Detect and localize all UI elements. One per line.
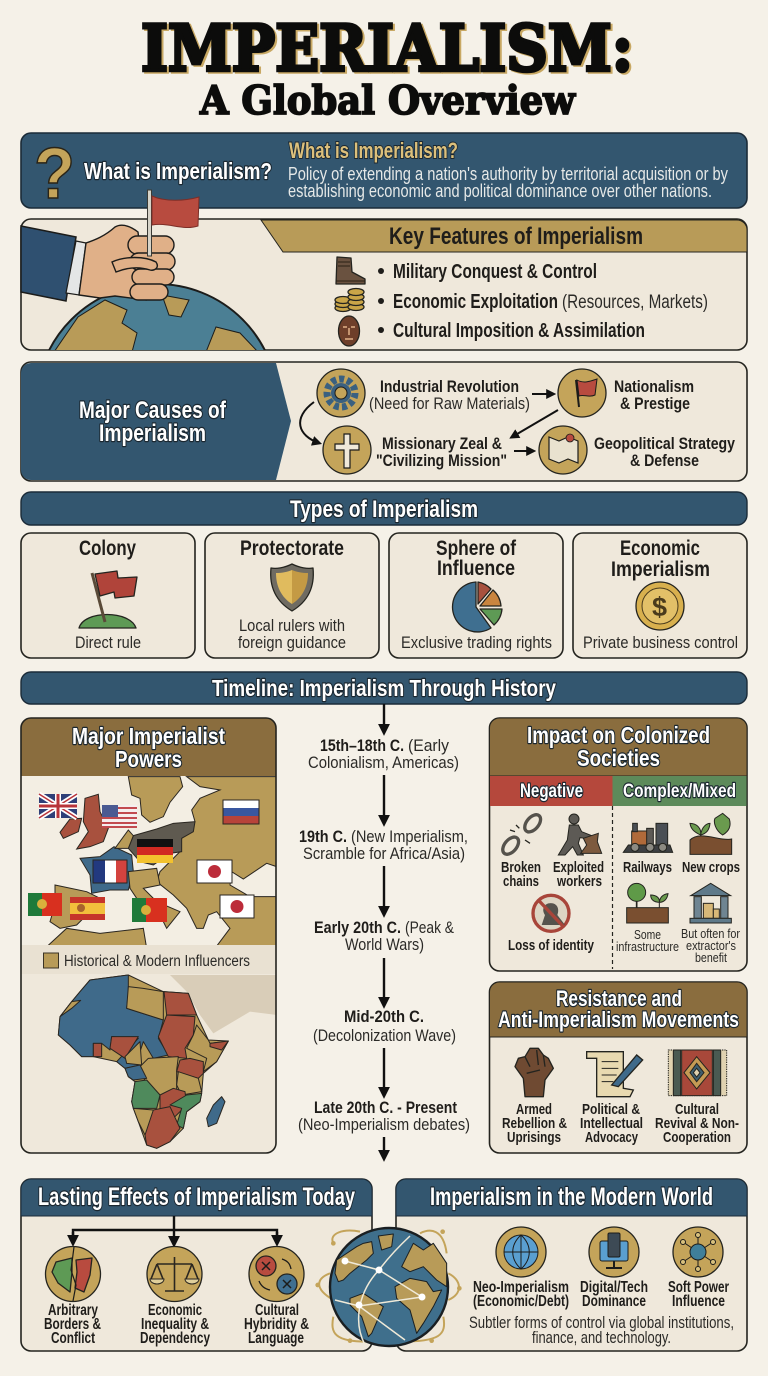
event: mid 20th century: (Decolonization Wave) [313, 1026, 456, 1045]
labels: mixed impacts [616, 859, 741, 965]
header: resistance [490, 982, 747, 1037]
icon: dollar coin [636, 582, 684, 630]
icon: scales [147, 1246, 202, 1302]
timeline [298, 704, 470, 1158]
flag: france [93, 860, 127, 883]
event: early 20th century [314, 918, 455, 954]
label: economic inequality: Economic [148, 1302, 202, 1319]
title: IMPERIALISM: [143, 13, 635, 88]
flag: russia [223, 800, 259, 824]
icon: arbitrary borders [46, 1246, 100, 1302]
event: mid 20th century [313, 1007, 456, 1045]
labels: mixed impacts: Railways [623, 859, 672, 876]
card: protectorate: Local rulers with [239, 616, 345, 635]
event: 15th-18th century: (Early [408, 736, 449, 755]
card: sphere of influence [389, 533, 563, 658]
flag: spain [70, 897, 105, 920]
banner: types of imperialism [21, 492, 747, 525]
icon: neo-imperialism [496, 1227, 546, 1277]
labels: resistance: Cooperation [663, 1129, 731, 1146]
label: soft power: Soft Power [668, 1279, 729, 1296]
arrow: to early 20th century [383, 866, 385, 914]
central globe [315, 1228, 462, 1346]
event: early 20th century: (Peak & [405, 918, 455, 937]
panel: lasting effects [21, 1179, 372, 1351]
card: protectorate: Protectorate [240, 537, 344, 560]
icon: mask [338, 316, 360, 346]
icon: bank [690, 883, 731, 923]
network nodes [342, 1258, 426, 1308]
icon: railway train [623, 823, 673, 852]
globe continents [335, 1234, 447, 1337]
event: 15th-18th century [308, 736, 459, 772]
label: neo-imperialism [473, 1279, 569, 1310]
labels: resistance [502, 1101, 739, 1146]
causes banner [21, 363, 291, 480]
illustration: flag [148, 190, 199, 256]
labels: negative impacts: Loss of identity [508, 937, 595, 954]
card: sphere of influence: Exclusive trading rights [401, 633, 552, 652]
labels: resistance: Revival & Non- [655, 1115, 739, 1132]
labels: resistance: Rebellion & [502, 1115, 567, 1132]
map: africa [58, 975, 277, 1148]
text: missionary zeal [376, 434, 507, 470]
arrow: to late 20th century [383, 1048, 385, 1095]
label: digital dominance [580, 1279, 648, 1310]
header: key features [261, 220, 747, 252]
icon: woven rug [668, 1050, 727, 1096]
column header: negative: Negative [520, 781, 583, 802]
labels: mixed impacts: benefit [695, 950, 727, 965]
arrow: to mid 20th century [383, 958, 385, 1005]
labels: resistance: Uprisings [507, 1129, 561, 1146]
label: arbitrary borders: Conflict [51, 1330, 95, 1347]
illustration: globe [48, 284, 266, 350]
label: cultural hybridity: Language [248, 1330, 304, 1347]
card: economic imperialism [573, 533, 747, 658]
arrow: timeline start [383, 704, 385, 732]
event: mid 20th century: Mid-20th C. [344, 1007, 424, 1026]
event: 19th century [299, 827, 468, 863]
label: economic inequality [140, 1302, 210, 1347]
panel: impact on colonized societies [490, 718, 747, 971]
panel: major causes [21, 362, 747, 481]
text: geopolitical [594, 434, 735, 470]
header: impact [490, 718, 747, 776]
legend: Historical & Modern Influencers [64, 953, 250, 970]
event: 19th century: 19th C. [299, 827, 347, 846]
arrow: industrial to missionary [300, 402, 319, 443]
icon: cross [323, 426, 371, 474]
card: protectorate: foreign guidance [238, 633, 346, 652]
causes banner: Imperialism [99, 420, 206, 447]
labels: resistance: Intellectual [580, 1115, 643, 1132]
event: late 20th century [298, 1098, 470, 1134]
header: impact: Impact on Colonized [527, 722, 710, 748]
flag: japan [197, 860, 232, 883]
panel: what is imperialism [21, 133, 747, 214]
feature list: Economic Exploitation [393, 291, 558, 313]
trade routes [335, 1236, 422, 1345]
labels: mixed impacts: extractor's [686, 938, 736, 953]
label: cultural hybridity: Hybridity & [244, 1316, 309, 1333]
header: key features: Key Features of Imperialism [389, 223, 643, 250]
panel: key features [20, 190, 748, 351]
labels: resistance: Advocacy [585, 1129, 638, 1146]
label: economic inequality: Inequality & [141, 1316, 209, 1333]
icon: raised fist [515, 1048, 553, 1097]
connector arrows [73, 1216, 277, 1244]
header: major powers: Major Imperialist [72, 723, 225, 749]
event: 15th-18th century: Colonialism, Americas) [308, 753, 459, 772]
icon: colony flag [79, 571, 137, 628]
header: lasting effects [21, 1179, 372, 1216]
label: cultural hybridity [244, 1302, 309, 1347]
flag: germany [137, 839, 173, 863]
card: sphere of influence: Influence [437, 557, 515, 580]
icon: soft power [673, 1227, 723, 1277]
card: economic imperialism: Imperialism [611, 558, 710, 581]
event: 19th century: Scramble for Africa/Asia) [303, 844, 465, 863]
label: digital dominance: Digital/Tech [580, 1279, 648, 1296]
event: late 20th century: (Neo-Imperialism debates) [298, 1115, 470, 1134]
text: nationalism [614, 377, 694, 413]
card: colony [21, 533, 195, 658]
arrow: missionary to geopolitics [514, 450, 533, 452]
panel: modern world [396, 1179, 747, 1351]
column header: negative [490, 776, 612, 806]
icon: scroll and pen [587, 1052, 643, 1097]
illustration: shirt cuff [66, 241, 86, 295]
flag: portugal second [132, 898, 167, 922]
title: IMPERIALISM: [141, 12, 633, 86]
illustration: jacket sleeve [21, 226, 76, 301]
feature list: (Resources, Markets) [562, 292, 708, 313]
icon: coins [335, 288, 364, 312]
arrow: nationalism to missionary [512, 410, 558, 437]
card: colony: Colony [79, 537, 136, 560]
icon: infrastructure [627, 883, 668, 923]
icon: shield [271, 564, 313, 611]
label: neo-imperialism: Neo-Imperialism [473, 1279, 569, 1296]
icon: boot [336, 257, 365, 284]
label: what is imperialism: What is Imperialism? [84, 158, 272, 184]
flag: united states [102, 805, 137, 828]
event: late 20th century: Late 20th C. - Present [314, 1098, 457, 1117]
banner: timeline [21, 672, 747, 704]
icon: cultural hybridity [249, 1246, 304, 1302]
definition text [288, 164, 728, 201]
icon: dollar coin: $ [652, 592, 667, 622]
labels: negative impacts: chains [503, 873, 539, 890]
text: industrial revolution: (Need for Raw Materials) [369, 394, 530, 413]
chart: pie icon [453, 582, 502, 632]
feature list: Military Conquest & Control [393, 261, 597, 283]
arrow: to 19th century [383, 775, 385, 823]
column header: complex: Complex/Mixed [623, 781, 736, 802]
title [141, 12, 635, 124]
header: modern world [396, 1179, 747, 1216]
icon: loss of identity [533, 895, 569, 931]
header: major powers: Powers [115, 746, 182, 772]
labels: negative impacts: workers [556, 873, 602, 890]
arrow: industrial to nationalism [532, 393, 553, 395]
flag: united kingdom [39, 794, 77, 818]
labels: mixed impacts: Some [634, 927, 661, 942]
text: geopolitical: & Defense [630, 451, 699, 470]
event: 15th-18th century: 15th–18th C. [320, 736, 404, 755]
label: economic inequality: Dependency [140, 1330, 210, 1347]
illustration: fist [79, 225, 175, 300]
header: impact: Societies [577, 745, 660, 771]
flag: portugal [28, 893, 62, 916]
text: modern control summary: finance, and technology. [532, 1328, 671, 1347]
label: cultural hybridity: Cultural [255, 1302, 299, 1319]
causes banner: Major Causes of [79, 397, 227, 424]
label: arbitrary borders: Borders & [44, 1316, 101, 1333]
title: A Global Overview [199, 78, 576, 124]
text: industrial revolution [369, 377, 530, 413]
icon: question mark: ? [34, 134, 75, 214]
panel: resistance [490, 982, 747, 1153]
labels: mixed impacts: New crops [682, 859, 740, 876]
icon: gear [317, 369, 365, 417]
arrow: timeline end [383, 1137, 385, 1158]
icon: digital dominance [589, 1227, 639, 1277]
labels: resistance: Political & [582, 1101, 640, 1118]
heading: definition: What is Imperialism? [289, 138, 458, 163]
text: nationalism: Nationalism [614, 377, 694, 396]
icon: flag circle [558, 369, 606, 417]
icon: map [539, 426, 587, 474]
event: early 20th century: World Wars) [345, 935, 424, 954]
banner: timeline: Timeline: Imperialism Through History [212, 675, 556, 701]
text: missionary zeal: Missionary Zeal & [382, 434, 502, 453]
feature list [378, 261, 708, 342]
icon: exploited worker [558, 814, 602, 855]
label: digital dominance: Dominance [582, 1293, 646, 1310]
card: colony: Direct rule [75, 633, 141, 652]
header: lasting effects: Lasting Effects of Imperialism Today [38, 1183, 355, 1211]
labels: negative impacts [501, 859, 604, 954]
card: protectorate [205, 533, 379, 658]
card: economic imperialism: Economic [620, 537, 700, 560]
text: missionary zeal: "Civilizing Mission" [376, 451, 507, 470]
legend [21, 945, 276, 974]
label: arbitrary borders [44, 1302, 101, 1347]
header: major powers [21, 718, 276, 776]
labels: negative impacts: Exploited [553, 859, 604, 876]
label: soft power [668, 1279, 729, 1310]
map: europe [21, 776, 277, 948]
labels: resistance: Armed [516, 1101, 552, 1118]
text: nationalism: & Prestige [620, 394, 690, 413]
orbit rings [315, 1229, 462, 1343]
text: modern control summary [469, 1313, 734, 1347]
event: early 20th century: Early 20th C. [314, 918, 401, 937]
label: neo-imperialism: (Economic/Debt) [473, 1293, 569, 1310]
card: economic imperialism: Private business control [583, 633, 738, 652]
event: 19th century: (New Imperialism, [351, 827, 468, 846]
text: geopolitical: Geopolitical Strategy [594, 434, 735, 453]
labels: mixed impacts: But often for [681, 926, 741, 941]
card: sphere of influence: Sphere of [436, 537, 517, 560]
feature list: Cultural Imposition & Assimilation [393, 320, 645, 342]
icon: new crops [690, 813, 732, 854]
panel: major imperialist powers [21, 718, 277, 1153]
text: industrial revolution: Industrial Revolution [380, 377, 519, 396]
column header: complex [612, 776, 746, 806]
label: soft power: Influence [672, 1293, 725, 1310]
header: resistance: Resistance and [556, 986, 682, 1011]
flag: japan second [220, 895, 254, 918]
label: arbitrary borders: Arbitrary [48, 1302, 98, 1319]
icon: broken chains [500, 812, 544, 857]
banner: types of imperialism: Types of Imperialism [290, 496, 478, 523]
labels: mixed impacts: infrastructure [616, 939, 679, 954]
labels: resistance: Cultural [675, 1101, 719, 1118]
labels: negative impacts: Broken [501, 859, 541, 876]
